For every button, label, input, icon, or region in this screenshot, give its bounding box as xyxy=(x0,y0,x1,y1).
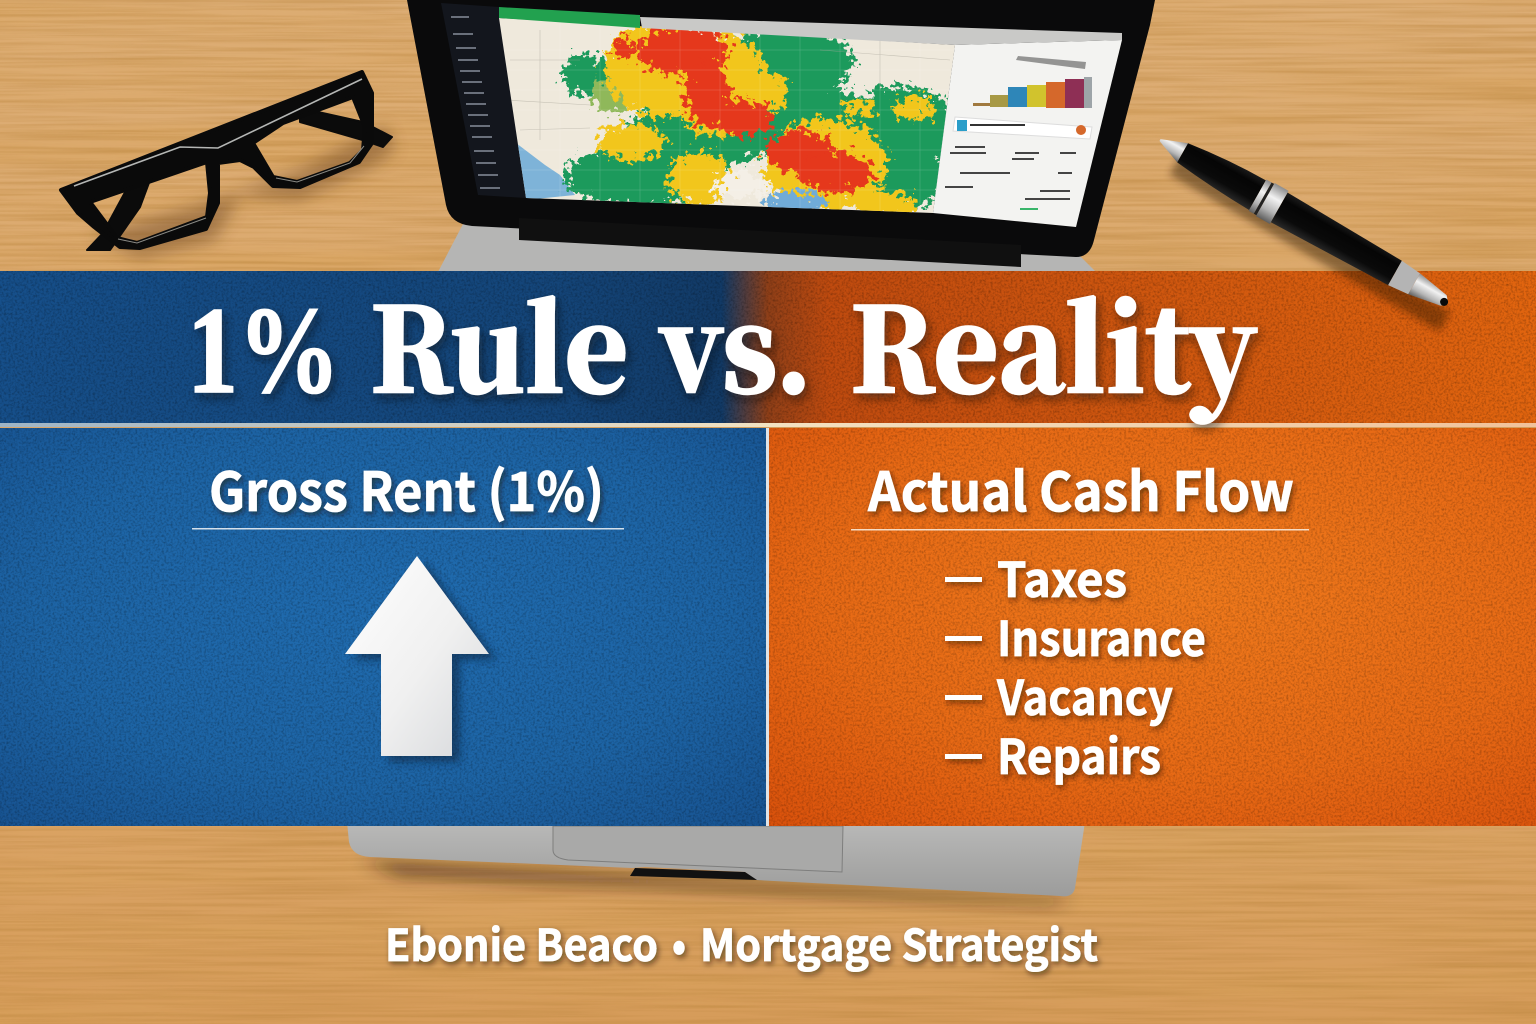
band rule xyxy=(0,423,1536,427)
right panel: actual cash flow xyxy=(769,428,1536,826)
deduction list: Vacancy xyxy=(996,659,1173,729)
footer: author credit xyxy=(385,910,1098,974)
deduction list: Insurance xyxy=(997,600,1206,670)
screen sidebar xyxy=(441,3,526,198)
laptop base lower xyxy=(347,822,1085,905)
left panel: gross rent xyxy=(0,428,766,826)
bar chart xyxy=(973,77,1092,108)
deduction list: Taxes xyxy=(997,541,1127,611)
heading: gross rent: Gross Rent (1%) xyxy=(209,448,604,527)
icon: up arrow xyxy=(345,556,497,762)
side panel with chart xyxy=(499,7,1122,227)
glasses xyxy=(61,72,395,258)
laptop lid xyxy=(407,0,1155,257)
heading: actual cash flow: Actual Cash Flow xyxy=(867,448,1294,527)
pen xyxy=(1151,123,1457,322)
trackpad xyxy=(553,826,843,872)
center divider xyxy=(766,428,769,826)
deduction list xyxy=(945,541,1206,788)
title band xyxy=(0,271,1536,423)
title: Rule xyxy=(370,259,628,426)
title: vs. xyxy=(658,259,812,426)
laptop xyxy=(407,0,1155,272)
title xyxy=(187,259,1258,426)
laptop base top xyxy=(438,224,1096,272)
hinge bar xyxy=(519,218,1021,267)
footer: author credit: Mortgage Strategist xyxy=(700,910,1098,974)
title: Reality xyxy=(850,259,1258,426)
footer: author credit: Ebonie Beaco xyxy=(385,910,658,974)
heat map xyxy=(499,18,955,213)
title: 1% xyxy=(187,282,340,419)
deduction list: Repairs xyxy=(997,718,1161,788)
footer: author credit: • xyxy=(672,910,686,974)
